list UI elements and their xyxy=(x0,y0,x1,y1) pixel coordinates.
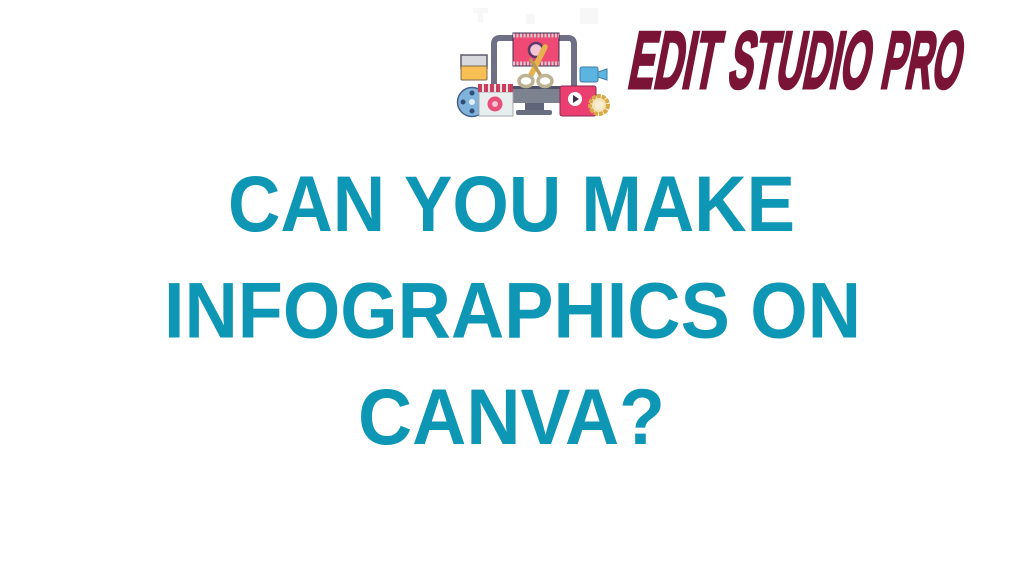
icon: folder xyxy=(461,55,487,80)
icon: play panel xyxy=(560,86,596,116)
logo text: EDIT STUDIO PRO xyxy=(623,16,972,106)
title xyxy=(164,159,861,461)
icon: faint top marks xyxy=(473,8,598,24)
icon: gear xyxy=(590,96,608,114)
logo word: EDIT: EDIT xyxy=(623,16,729,106)
icon: video editing illustration xyxy=(458,33,608,116)
icon: monitor xyxy=(494,38,574,115)
title line 2: INFOGRAPHICS ON xyxy=(164,266,861,354)
title line 3: CANVA? xyxy=(358,372,665,461)
icon: scissors xyxy=(519,47,552,86)
icon: film strip xyxy=(513,33,559,66)
icon: clapperboard xyxy=(478,84,513,116)
title line 1: CAN YOU MAKE xyxy=(228,159,795,248)
icon: camera xyxy=(580,67,607,82)
icon: film reel xyxy=(458,88,486,116)
